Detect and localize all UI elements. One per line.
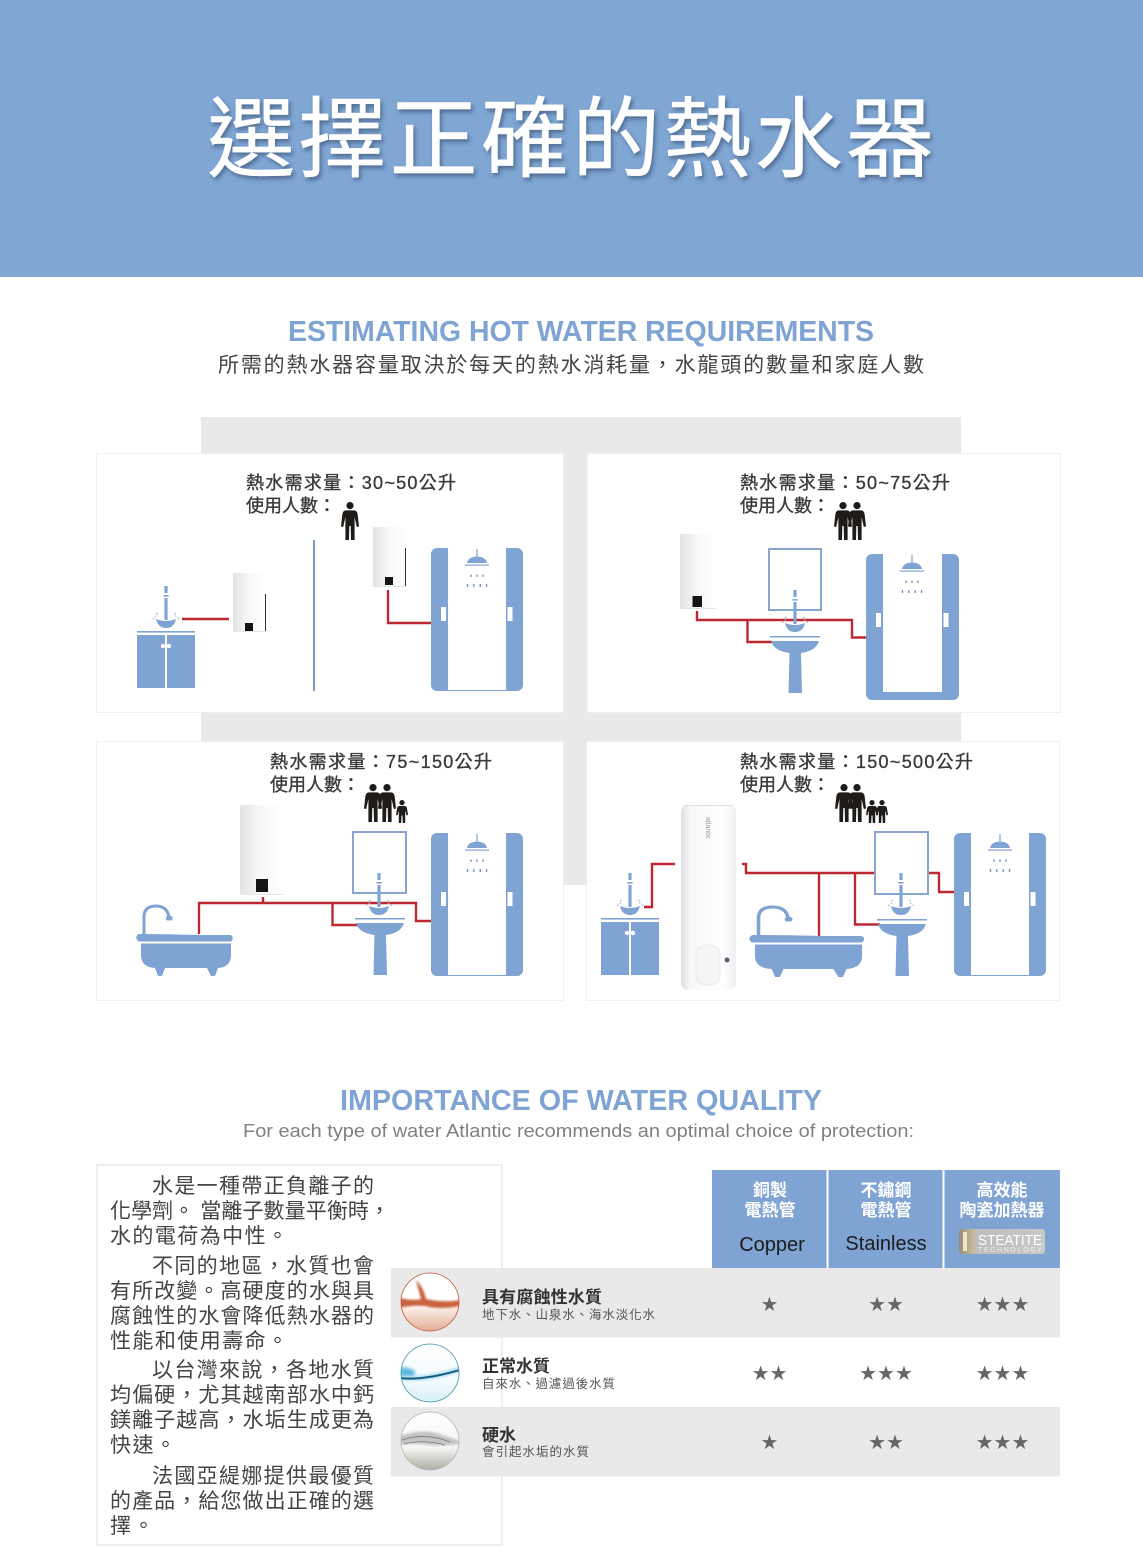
separating wall bbox=[313, 540, 315, 691]
panel 2 users label: 使用人數： bbox=[740, 496, 830, 516]
icon: kitchen faucet bbox=[153, 586, 179, 628]
row: hard water bbox=[391, 1407, 1060, 1476]
icon: faucet bbox=[888, 873, 914, 915]
ratings row 1: ★★ bbox=[868, 1292, 904, 1316]
badge: steatite technology bbox=[959, 1229, 1045, 1254]
panel: explanatory text: 擇。 bbox=[110, 1515, 154, 1538]
icon: shower bbox=[431, 833, 523, 976]
icon: couple bbox=[834, 502, 866, 540]
icon: kitchen cabinet bbox=[137, 631, 195, 688]
ratings row 3: ★★ bbox=[868, 1430, 904, 1454]
ratings row 3: ★★★ bbox=[976, 1430, 1029, 1454]
panel: 150-500 litres bbox=[586, 742, 1060, 1000]
pipes bbox=[199, 897, 431, 934]
panel 4 users label: 使用人數： bbox=[740, 775, 830, 795]
icon: bathtub bbox=[136, 906, 233, 976]
mirror bbox=[875, 832, 928, 894]
row: corrosive water bbox=[391, 1268, 1060, 1338]
ratings row 2: ★★ bbox=[752, 1361, 787, 1385]
panel: explanatory text bbox=[97, 1165, 502, 1545]
floor-standing water tank bbox=[681, 805, 736, 990]
panel 3 requirement text: 熱水需求量：75~150公升 bbox=[270, 752, 492, 772]
panel: explanatory text: 快速。 bbox=[110, 1434, 176, 1457]
column header: copper: 電熱管 bbox=[744, 1200, 796, 1220]
column header: steatite bbox=[944, 1170, 1060, 1268]
water heater left bbox=[233, 573, 266, 632]
panel: 30-50 litres bbox=[96, 454, 564, 712]
icon: corrosive water splash bbox=[400, 1273, 460, 1331]
subtitle: For each type of water Atlantic recommends an optimal choice of protection: bbox=[243, 1121, 914, 1141]
mirror bbox=[769, 549, 821, 610]
column header: copper bbox=[712, 1170, 826, 1268]
panel: explanatory text: 鎂離子越高，水垢生成更為 bbox=[110, 1409, 374, 1432]
ratings row 2: ★★★ bbox=[859, 1361, 913, 1385]
icon: hard water bbox=[400, 1412, 460, 1470]
subtitle: 所需的熱水器容量取決於每天的熱水消耗量，水龍頭的數量和家庭人數 bbox=[218, 354, 924, 377]
panel 1 users label: 使用人數： bbox=[246, 496, 336, 516]
icon: family of three bbox=[364, 784, 408, 823]
ratings row 3: ★ bbox=[761, 1430, 778, 1454]
panel: 50-75 litres bbox=[588, 454, 1060, 712]
column header: steatite: 高效能 bbox=[976, 1180, 1028, 1200]
panel: 75-150 litres bbox=[96, 742, 564, 1000]
panel: explanatory text: 腐蝕性的水會降低熱水器的 bbox=[110, 1305, 374, 1328]
heading: estimating hot water requirements: ESTIMATING HOT WATER REQUIREMENTS bbox=[288, 316, 874, 348]
pipes bbox=[742, 864, 954, 936]
panel: explanatory text: 水是一種帶正負離子的 bbox=[152, 1175, 374, 1198]
icon: normal water wave bbox=[400, 1344, 460, 1402]
column header: copper: 銅製 bbox=[753, 1180, 787, 1200]
water heater right bbox=[373, 527, 406, 587]
mirror bbox=[353, 832, 406, 893]
water heater bbox=[240, 805, 284, 895]
pipe to kitchen bbox=[182, 618, 229, 620]
panel 4 requirement text: 熱水需求量：150~500公升 bbox=[740, 752, 973, 772]
icon: bathtub bbox=[749, 907, 864, 977]
column header: copper: Copper bbox=[739, 1234, 805, 1256]
row 2 description: 自來水、過濾過後水質 bbox=[482, 1376, 615, 1391]
icon: shower bbox=[954, 833, 1046, 976]
row: normal water bbox=[400, 1344, 1029, 1402]
column header: stainless: 不鏽鋼 bbox=[860, 1180, 912, 1200]
panel: explanatory text: 化學劑。 當離子數量平衡時， bbox=[110, 1200, 390, 1223]
icon: sink bbox=[877, 919, 927, 976]
grey backdrop behind panels bbox=[201, 417, 961, 885]
pipe to kitchen bbox=[644, 864, 675, 907]
pipe to shower bbox=[388, 590, 431, 623]
icon: family of four bbox=[835, 784, 888, 823]
panel: explanatory text: 以台灣來說，各地水質 bbox=[152, 1359, 374, 1382]
row 2 label: 正常水質 bbox=[482, 1357, 550, 1376]
title: 選擇正確的熱水器 bbox=[207, 90, 934, 189]
icon: kitchen cabinet bbox=[601, 918, 659, 975]
header banner bbox=[0, 0, 1143, 277]
icon: faucet bbox=[782, 590, 808, 632]
badge: steatite technology: STEATITE bbox=[978, 1232, 1042, 1249]
heading: importance of water quality: IMPORTANCE OF WATER QUALITY bbox=[340, 1085, 822, 1117]
panel: explanatory text: 的產品，給您做出正確的選 bbox=[110, 1490, 374, 1513]
icon: single person bbox=[341, 502, 359, 540]
panel: explanatory text: 性能和使用壽命。 bbox=[110, 1330, 288, 1353]
ratings row 1: ★ bbox=[761, 1292, 778, 1316]
panel: explanatory text: 有所改變。高硬度的水與具 bbox=[110, 1280, 374, 1303]
panel: explanatory text: 均偏硬，尤其越南部水中鈣 bbox=[110, 1384, 374, 1407]
row 3 label: 硬水 bbox=[482, 1426, 516, 1445]
panel: explanatory text: 水的電荷為中性。 bbox=[110, 1225, 288, 1248]
icon: shower bbox=[866, 554, 959, 700]
column header: stainless: 電熱管 bbox=[860, 1200, 912, 1220]
pipes bbox=[697, 611, 866, 642]
panel 3 users label: 使用人數： bbox=[270, 775, 360, 795]
panel: explanatory text: 不同的地區，水質也會 bbox=[152, 1255, 374, 1278]
icon: kitchen faucet bbox=[617, 873, 643, 915]
row 1 description: 地下水、山泉水、海水淡化水 bbox=[482, 1307, 655, 1322]
panel 2 requirement text: 熱水需求量：50~75公升 bbox=[740, 473, 950, 493]
ratings row 2: ★★★ bbox=[976, 1361, 1029, 1385]
icon: faucet bbox=[366, 873, 392, 915]
panel: explanatory text: 法國亞緹娜提供最優質 bbox=[152, 1465, 374, 1488]
floor-standing water tank: atlantic bbox=[704, 817, 711, 840]
icon: shower bbox=[431, 548, 523, 691]
column header: stainless bbox=[828, 1170, 942, 1268]
icon: sink bbox=[770, 636, 820, 693]
ratings row 3 bbox=[761, 1430, 1029, 1454]
water heater bbox=[680, 534, 716, 609]
row 3 description: 會引起水垢的水質 bbox=[482, 1444, 589, 1459]
icon: sink bbox=[355, 918, 405, 975]
table: protection ratings bbox=[391, 1170, 1060, 1476]
column header: steatite: 陶瓷加熱器 bbox=[960, 1200, 1044, 1220]
panel 1 requirement text: 熱水需求量：30~50公升 bbox=[246, 473, 456, 493]
ratings row 1: ★★★ bbox=[976, 1292, 1029, 1316]
column header: stainless: Stainless bbox=[845, 1233, 927, 1255]
ratings row 2 bbox=[752, 1361, 1029, 1385]
row 1 label: 具有腐蝕性水質 bbox=[482, 1287, 602, 1307]
badge: steatite technology: TECHNOLOGY bbox=[978, 1247, 1042, 1254]
ratings row 1 bbox=[761, 1292, 1029, 1316]
